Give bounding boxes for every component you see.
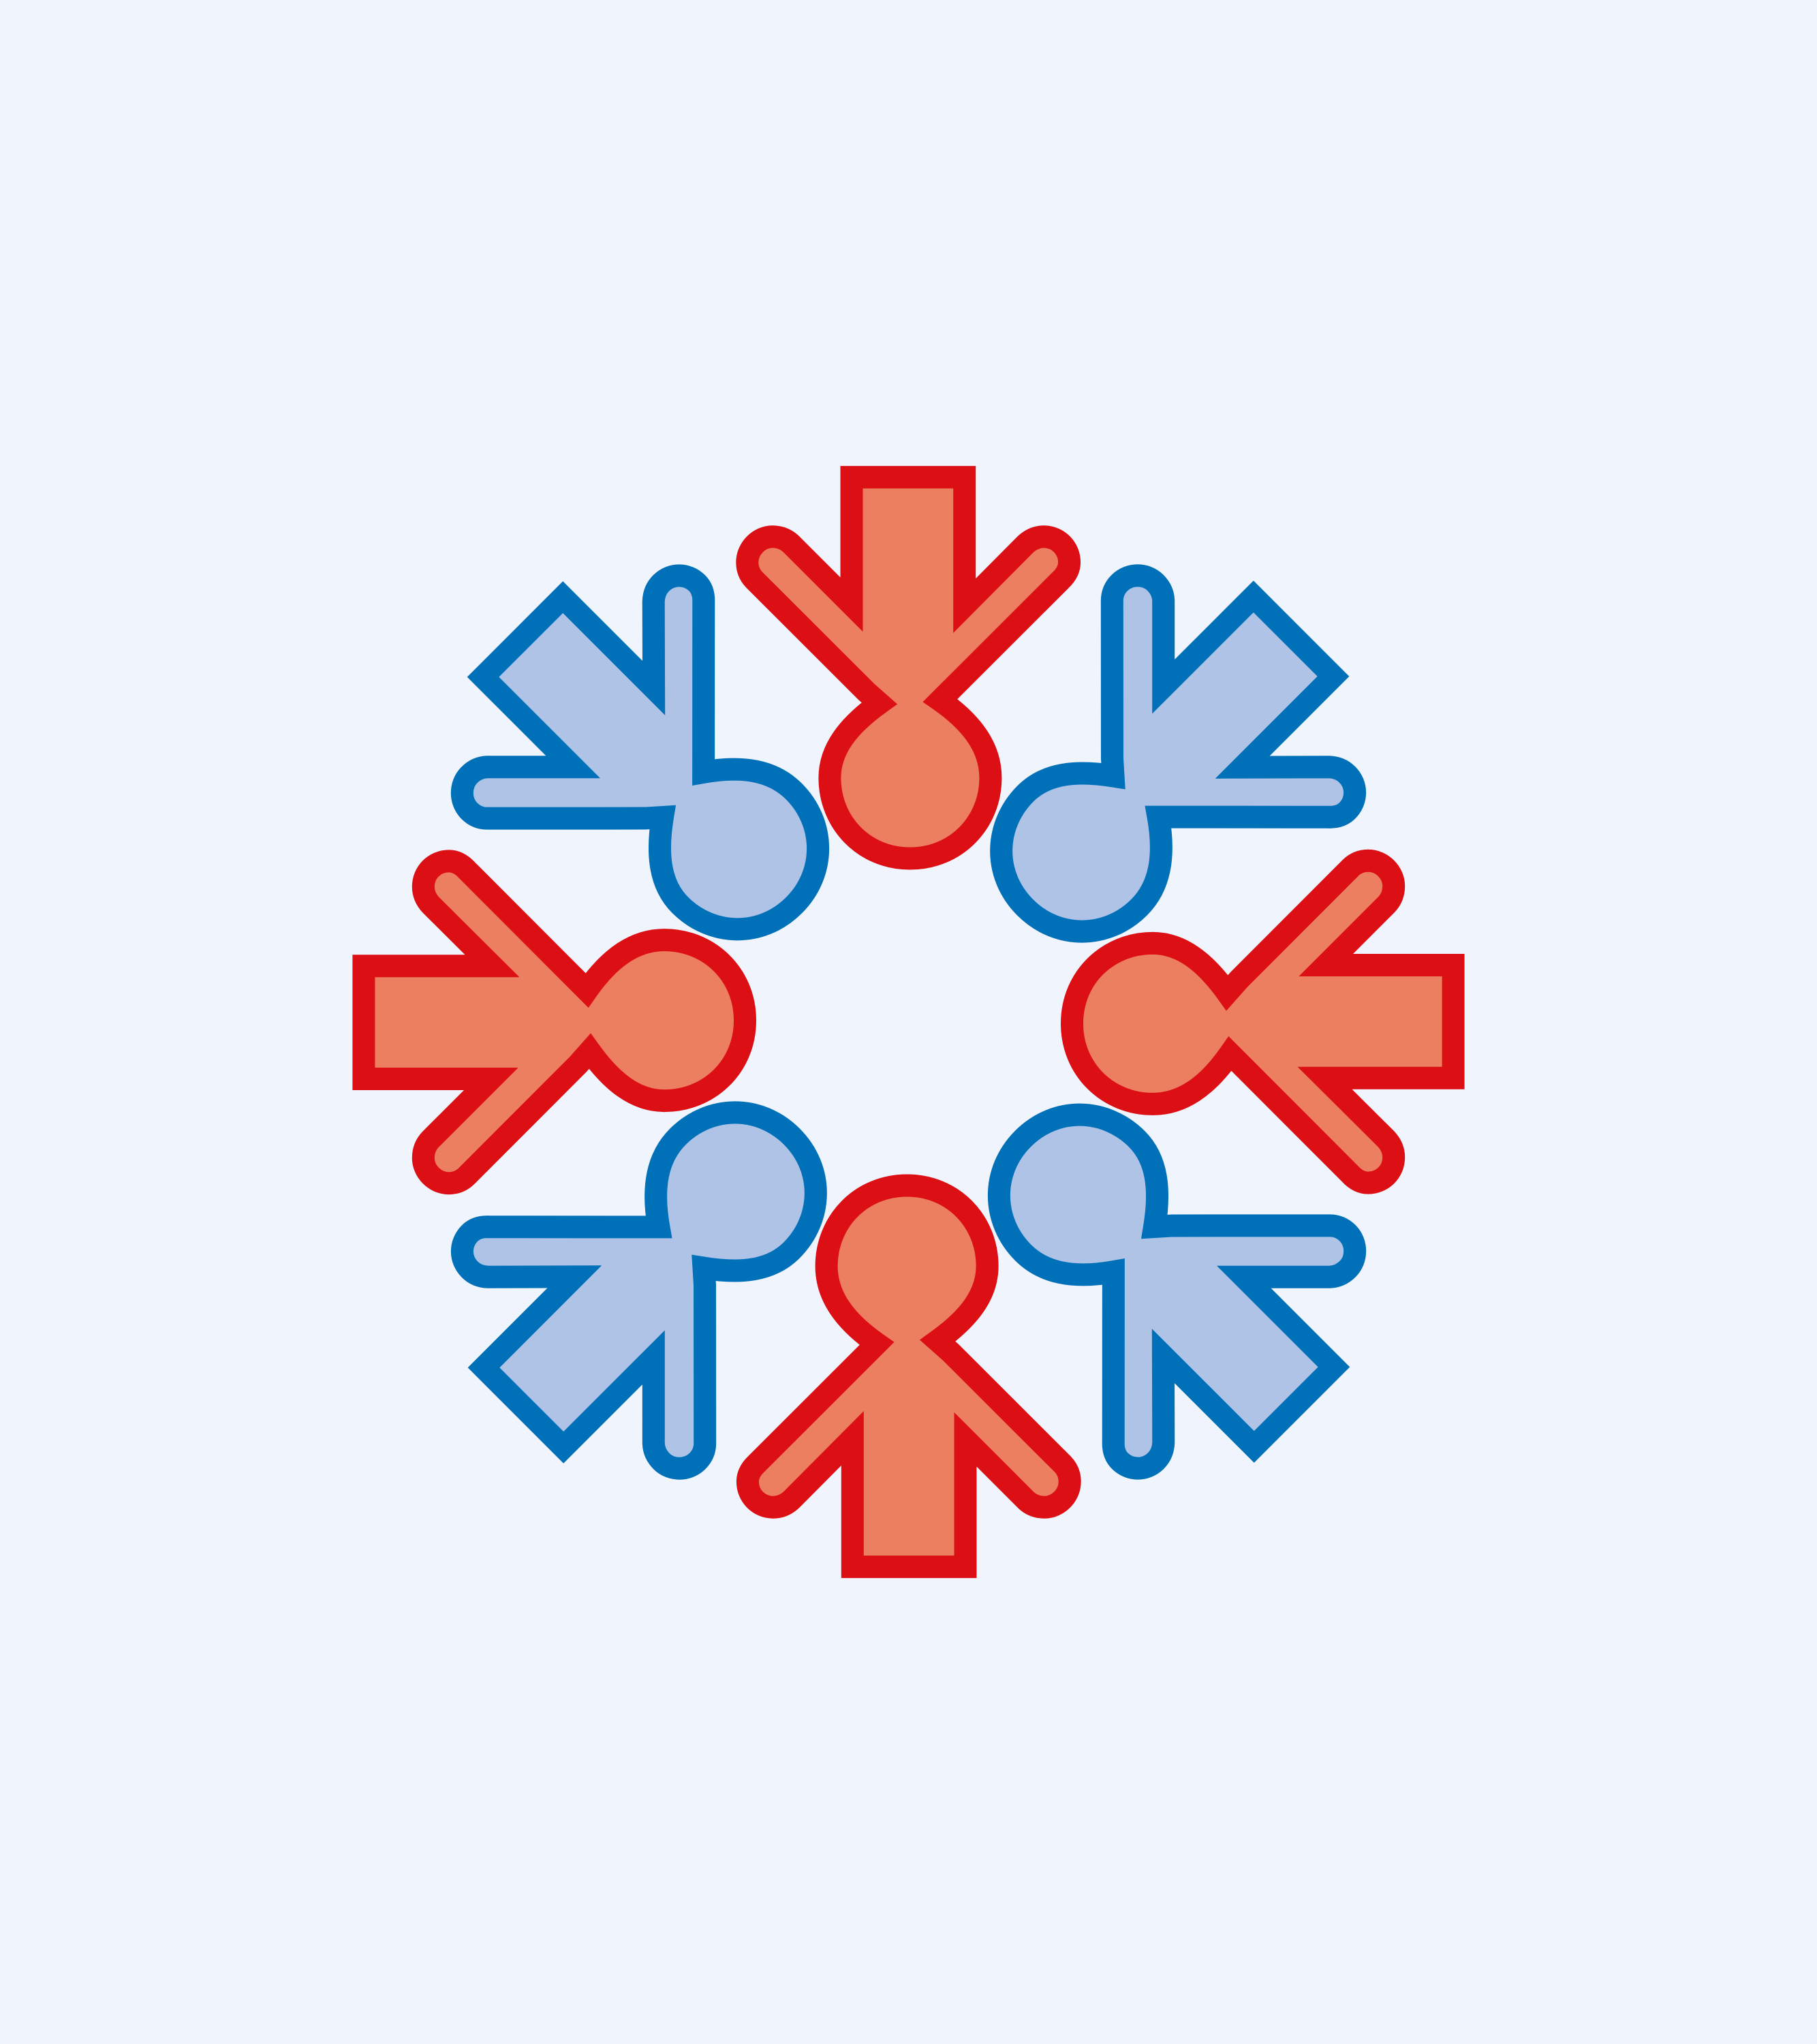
icon: blue person bottom left	[409, 1024, 907, 1521]
icon: red person top	[747, 477, 1070, 858]
icon: blue person top left	[409, 523, 907, 1021]
icon: blue person bottom right	[910, 1023, 1408, 1521]
icon: red person left	[364, 861, 745, 1183]
icon: red person right	[1072, 861, 1453, 1183]
icon: blue person top right	[910, 523, 1408, 1020]
icon: red person bottom	[747, 1186, 1070, 1567]
